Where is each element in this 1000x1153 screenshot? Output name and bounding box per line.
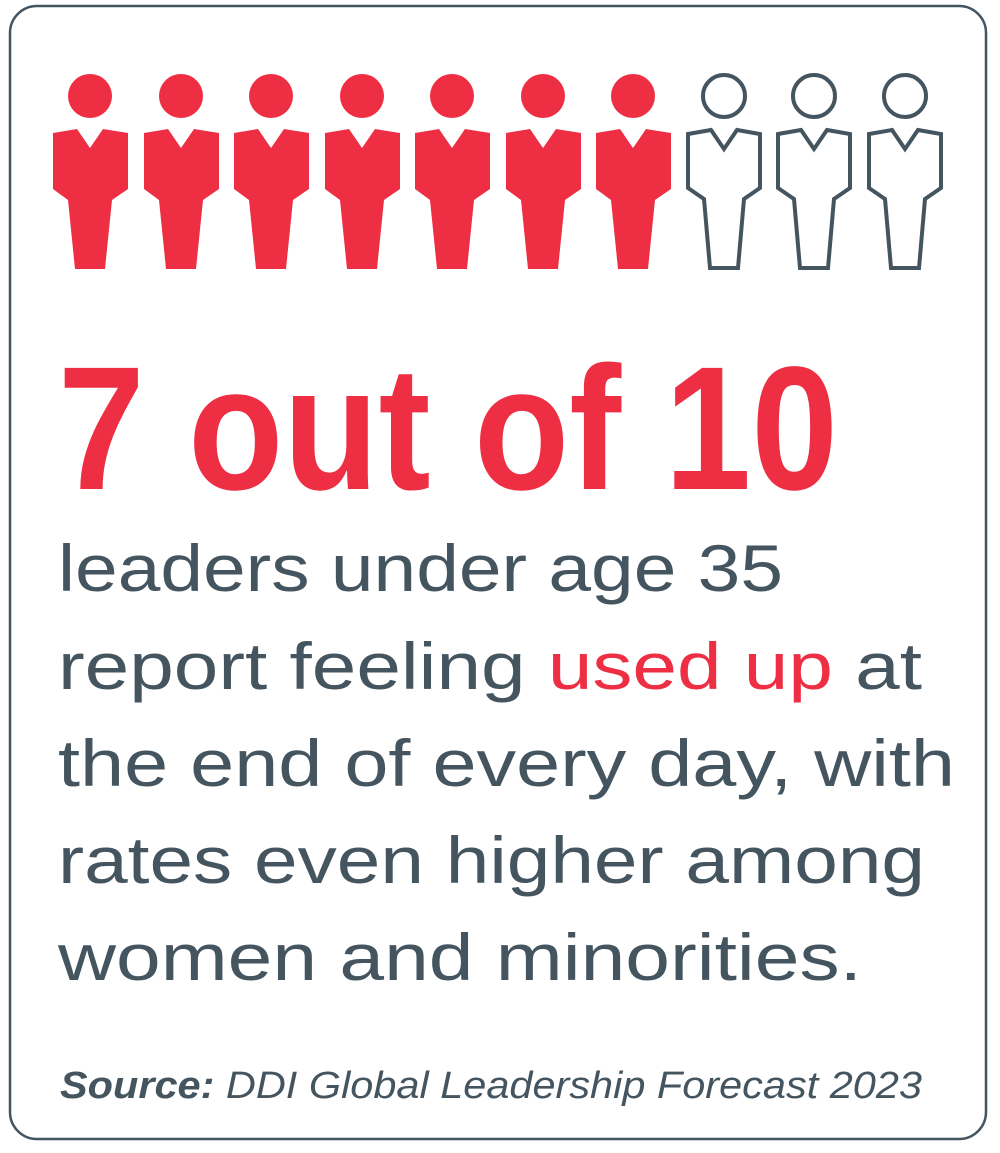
description text: report feeling used up at xyxy=(58,629,922,703)
pictogram: 7 of 10 people xyxy=(53,74,941,269)
source line: Source: DDI Global Leadership Forecast 2023 xyxy=(60,1065,922,1107)
description text xyxy=(57,531,955,994)
description text: rates even higher among xyxy=(58,823,925,897)
description text: the end of every day, with xyxy=(58,726,955,800)
description text: leaders under age 35 xyxy=(58,531,783,605)
headline statistic: 7 out of 10 xyxy=(58,331,838,527)
description text: women and minorities. xyxy=(57,920,862,994)
